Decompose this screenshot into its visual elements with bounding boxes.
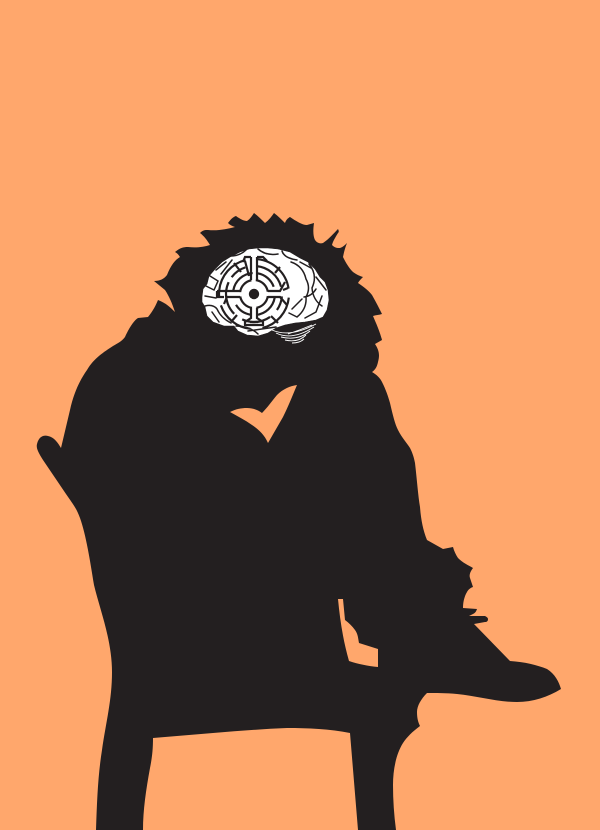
cerebellum: [272, 324, 316, 343]
maze rings: [238, 278, 270, 310]
icon: brain with maze: [202, 248, 329, 343]
brain outline: [202, 248, 329, 336]
maze: [216, 256, 292, 332]
brain folds: [205, 249, 326, 334]
maze spokes: [217, 257, 288, 325]
maze centre dot: [249, 289, 259, 299]
silhouette: seated figure on chair: [37, 213, 561, 830]
